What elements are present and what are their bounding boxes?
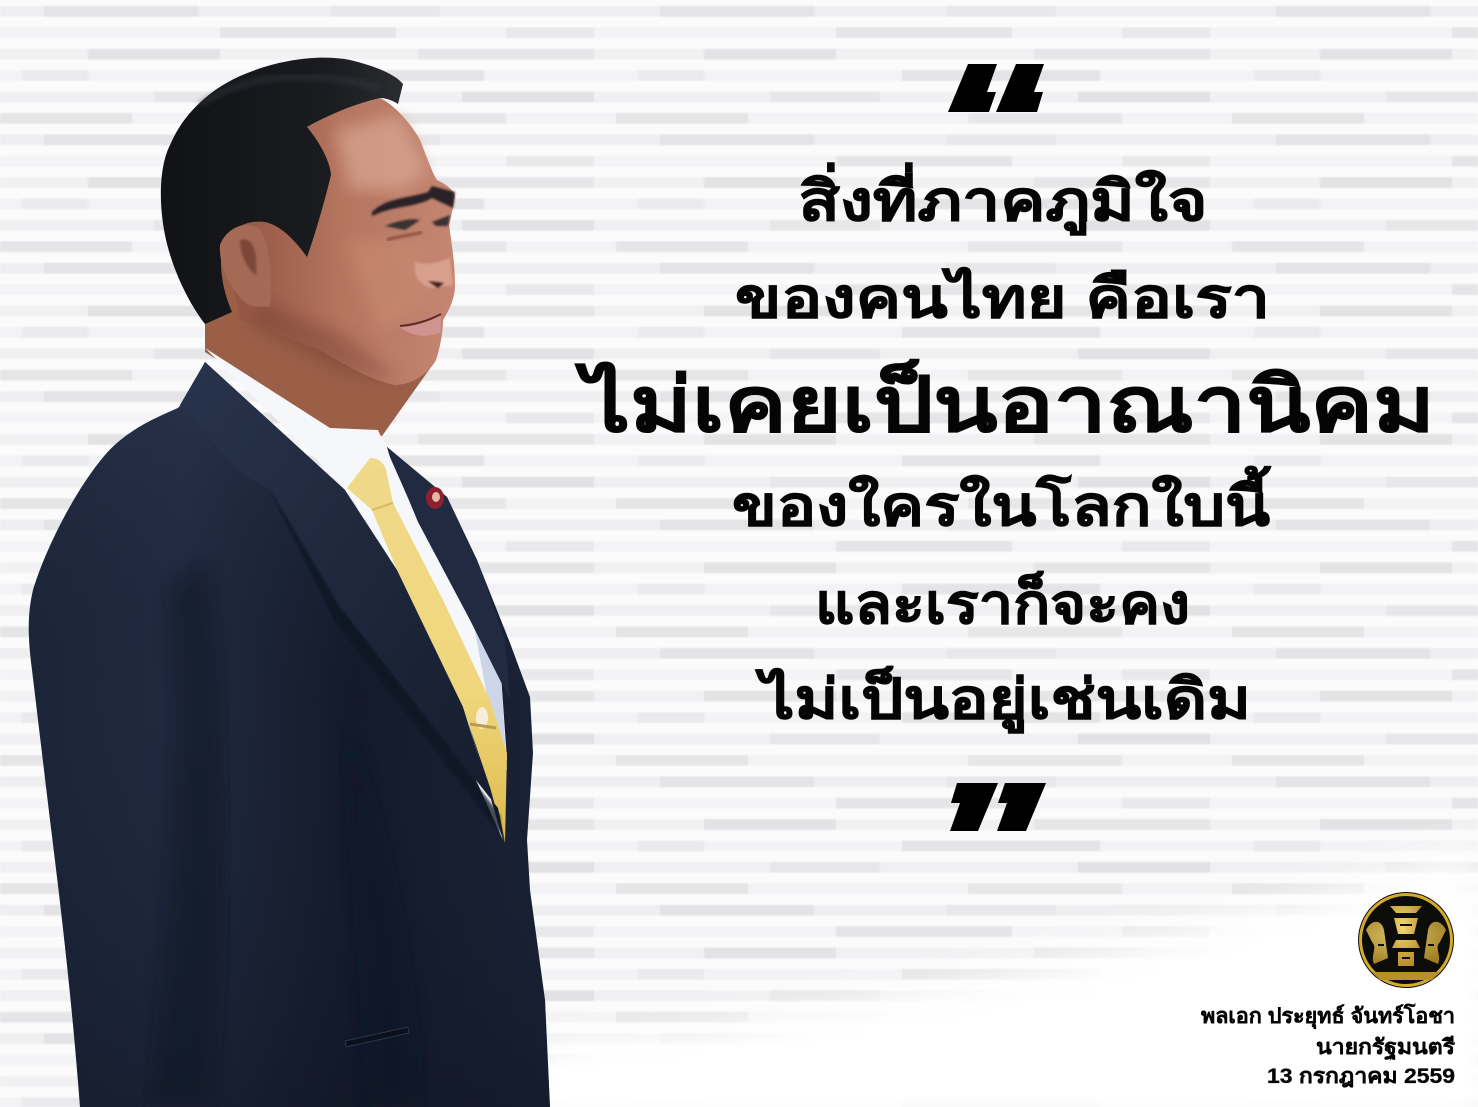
line 1: สิ่งที่ภาคภูมิใจ: [798, 162, 1208, 236]
right lapel: [387, 447, 510, 700]
portrait: man in navy suit: [29, 58, 550, 1107]
position: นายกรัฐมนตรี: [1316, 1035, 1456, 1061]
mouth: [400, 316, 441, 336]
jacket pocket: [345, 1027, 409, 1047]
closing quotation mark: [950, 783, 1046, 831]
shirt: [205, 348, 507, 787]
emblem: government seal: [1358, 892, 1454, 988]
eye: [385, 215, 450, 230]
ear: [220, 225, 271, 307]
eyebrow: [372, 186, 455, 216]
jacket body: [29, 362, 550, 1107]
nose: [415, 258, 453, 288]
sleeve shading: [150, 560, 224, 1107]
left lapel: [180, 362, 505, 842]
attribution text: [1201, 1003, 1456, 1088]
line 5: และเราก็จะคง: [815, 571, 1190, 635]
name: พลเอก ประยุทธ์ จันทร์โอชา: [1201, 1003, 1455, 1030]
necktie: [347, 458, 507, 843]
opening quotation mark: [948, 64, 1044, 112]
face: [225, 98, 455, 385]
date: 13 กรกฎาคม 2559: [1267, 1065, 1455, 1088]
line 4: ของใครในโลกใบนี้: [732, 466, 1271, 537]
neck and head base: [205, 240, 436, 436]
line 6: ไม่เป็นอยู่เช่นเดิม: [755, 666, 1251, 734]
line 2: ของคนไทย คือเรา: [735, 266, 1270, 329]
quote text: [574, 162, 1435, 734]
line 3: emphasized: ไม่เคยเป็นอาณานิคม: [574, 359, 1435, 448]
hair: [161, 58, 403, 324]
lapel pin: [426, 487, 444, 509]
